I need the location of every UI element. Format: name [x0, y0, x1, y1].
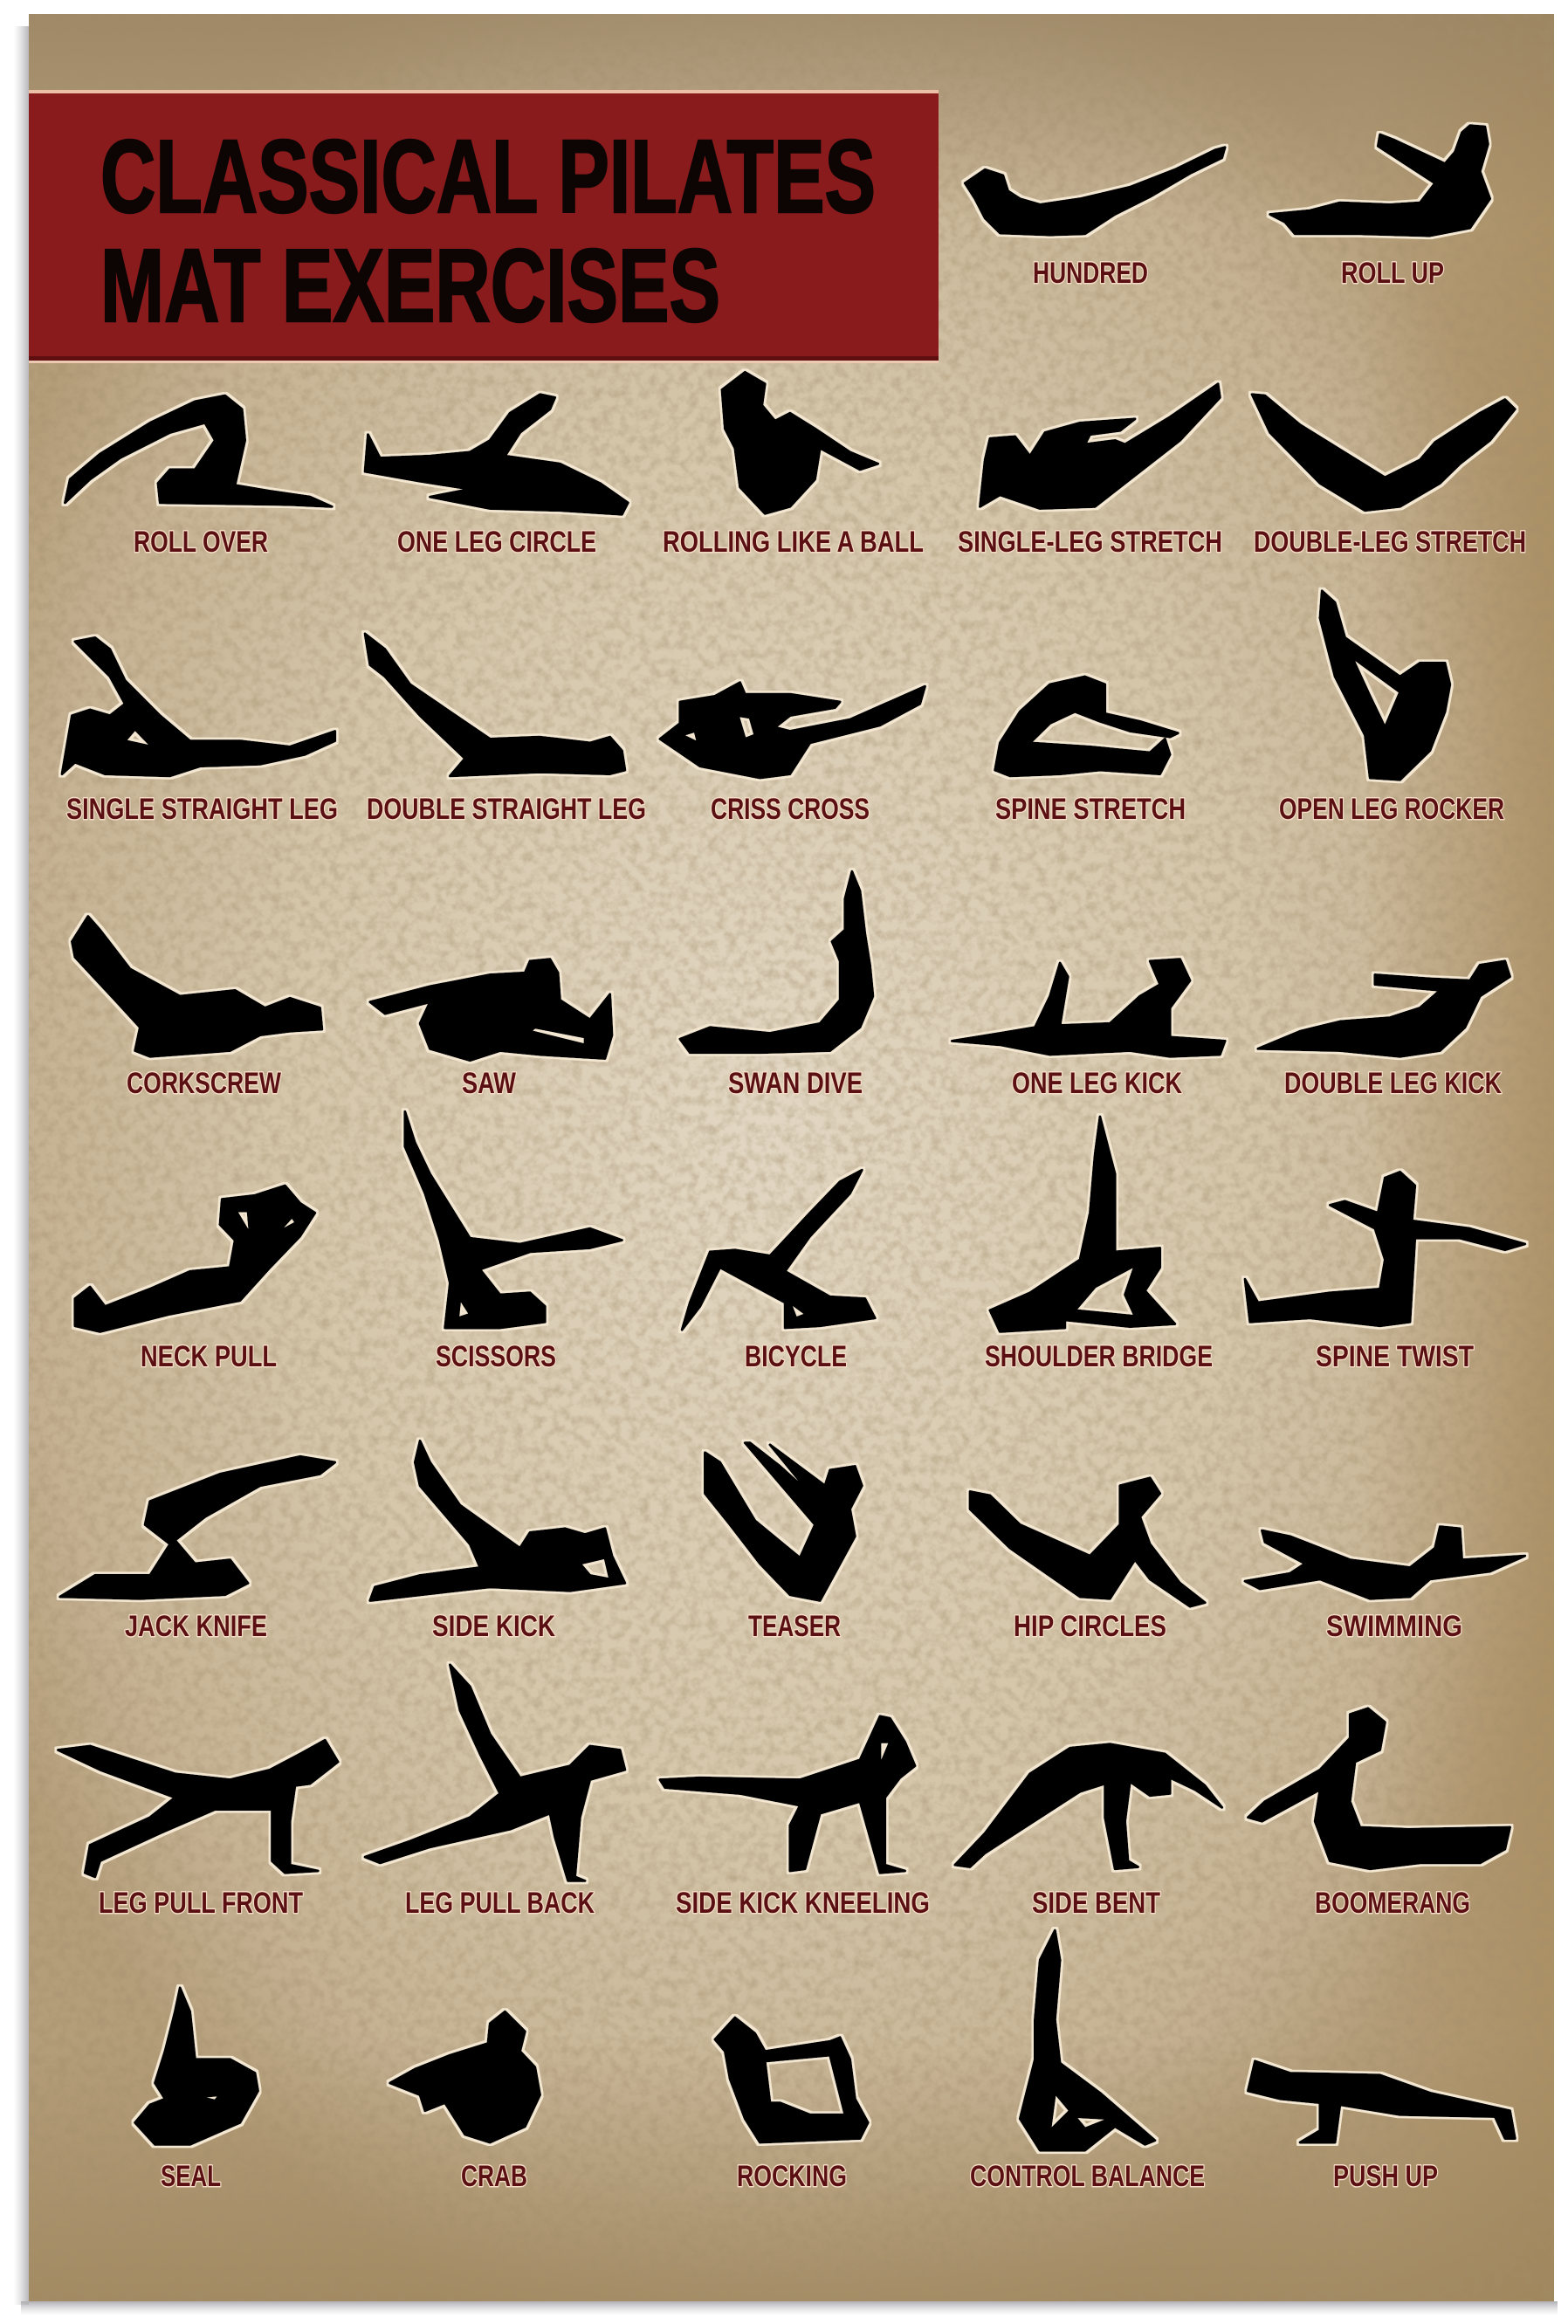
exercise: rocking [715, 2018, 868, 2193]
silhouette: bicycle [682, 1170, 875, 1330]
exercise: boomerang [1248, 1709, 1510, 1920]
label: swan dive: SWAN DIVE [728, 1067, 863, 1100]
title: CLASSICAL PILATES [100, 119, 876, 235]
silhouette: side kick kneeling [660, 1716, 915, 1873]
exercise: neck pull [75, 1186, 315, 1373]
label: hip circles: HIP CIRCLES [1014, 1610, 1166, 1643]
silhouette: saw [370, 959, 612, 1061]
label: single straight leg: SINGLE STRAIGHT LEG [66, 793, 338, 826]
label: side kick kneeling: SIDE KICK KNEELING [676, 1887, 930, 1920]
label: roll up: ROLL UP [1341, 257, 1444, 290]
label: rocking: ROCKING [737, 2160, 847, 2193]
label: teaser: TEASER [748, 1610, 841, 1643]
silhouette: double straight leg [365, 634, 625, 776]
exercise: side kick [370, 1440, 625, 1643]
label: single-leg stretch: SINGLE-LEG STRETCH [958, 526, 1222, 559]
label: leg pull front: LEG PULL FRONT [99, 1887, 303, 1920]
silhouette: one leg circle [365, 395, 628, 514]
exercise: teaser [705, 1443, 862, 1643]
label: swimming: SWIMMING [1326, 1610, 1462, 1643]
exercise: side bent [955, 1744, 1222, 1920]
silhouette: side bent [955, 1744, 1222, 1869]
exercise: corkscrew [72, 917, 322, 1100]
silhouette: leg pull front [58, 1740, 338, 1877]
silhouette: double leg kick [1258, 961, 1510, 1056]
exercise: swimming [1245, 1527, 1525, 1643]
silhouette: side kick [370, 1440, 625, 1600]
label: double leg kick: DOUBLE LEG KICK [1284, 1067, 1502, 1100]
exercise: roll up [1270, 126, 1490, 290]
exercise: double straight leg [365, 634, 646, 826]
silhouette: corkscrew [72, 917, 322, 1056]
exercise: one leg kick [952, 959, 1225, 1100]
silhouette: crab [390, 2011, 540, 2142]
label: one leg circle: ONE LEG CIRCLE [397, 526, 596, 559]
label: open leg rocker: OPEN LEG ROCKER [1279, 793, 1504, 826]
silhouette: seal [135, 1988, 258, 2144]
exercise: one leg circle [365, 395, 628, 559]
label: double straight leg: DOUBLE STRAIGHT LEG [367, 793, 646, 826]
silhouette: jack knife [60, 1456, 335, 1599]
silhouette: leg pull back [365, 1665, 625, 1881]
label: boomerang: BOOMERANG [1315, 1887, 1470, 1920]
exercise: single straight leg [62, 637, 338, 826]
silhouette: hundred [965, 148, 1225, 235]
silhouette: spine stretch [995, 677, 1178, 776]
label: side bent: SIDE BENT [1032, 1887, 1160, 1920]
exercise: hip circles [970, 1478, 1205, 1643]
silhouette: neck pull [75, 1186, 315, 1331]
silhouette: rolling like a ball [722, 372, 878, 513]
exercise: swan dive [680, 871, 873, 1100]
label: corkscrew: CORKSCREW [127, 1067, 282, 1100]
exercise: roll over [65, 395, 332, 559]
exercise: leg pull front [58, 1740, 338, 1920]
silhouette: shoulder bridge [990, 1117, 1175, 1331]
exercise: spine stretch [995, 677, 1186, 826]
silhouette: roll up [1270, 126, 1490, 236]
label: jack knife: JACK KNIFE [125, 1610, 267, 1643]
label: spine twist: SPINE TWIST [1316, 1340, 1474, 1373]
exercise: control balance [970, 1930, 1205, 2193]
exercise: double-leg stretch [1252, 395, 1526, 559]
exercise: double leg kick [1258, 961, 1510, 1100]
silhouette: push up [1248, 2061, 1515, 2142]
label: leg pull back: LEG PULL BACK [405, 1887, 595, 1920]
silhouette: rocking [715, 2018, 868, 2142]
exercise: open leg rocker [1279, 591, 1504, 826]
label: scissors: SCISSORS [436, 1340, 556, 1373]
exercise: bicycle [682, 1170, 875, 1373]
label: roll over: ROLL OVER [134, 526, 268, 559]
label: spine stretch: SPINE STRETCH [995, 793, 1186, 826]
label: push up: PUSH UP [1333, 2160, 1438, 2193]
silhouette: swan dive [680, 871, 873, 1053]
label: bicycle: BICYCLE [745, 1340, 847, 1373]
silhouette: one leg kick [952, 959, 1225, 1056]
silhouette: criss cross [660, 683, 925, 778]
label: saw: SAW [462, 1067, 517, 1100]
label: side kick: SIDE KICK [432, 1610, 555, 1643]
title banner [29, 90, 939, 363]
silhouette: control balance [1020, 1930, 1155, 2150]
title: MAT EXERCISES [100, 228, 720, 344]
label: neck pull: NECK PULL [141, 1340, 277, 1373]
exercise: jack knife [60, 1456, 335, 1643]
title [100, 119, 876, 344]
exercise: crab [390, 2011, 540, 2193]
silhouette: roll over [65, 395, 332, 506]
silhouette: boomerang [1248, 1709, 1510, 1869]
silhouette: single straight leg [62, 637, 335, 776]
exercise: push up [1248, 2061, 1515, 2193]
exercise: rolling like a ball [663, 372, 924, 559]
exercise: hundred [965, 148, 1225, 290]
silhouette: teaser [705, 1443, 862, 1600]
silhouette: open leg rocker [1320, 591, 1450, 780]
silhouette: spine twist [1245, 1172, 1525, 1326]
label: seal: SEAL [161, 2160, 221, 2193]
silhouette: single-leg stretch [980, 384, 1220, 509]
exercise: single-leg stretch [958, 384, 1222, 559]
silhouette: double-leg stretch [1252, 395, 1515, 511]
exercise: seal [135, 1988, 258, 2193]
label: criss cross: CRISS CROSS [711, 793, 870, 826]
label: hundred: HUNDRED [1033, 257, 1148, 290]
exercise: spine twist [1245, 1172, 1525, 1373]
exercise: side kick kneeling [660, 1716, 930, 1920]
label: one leg kick: ONE LEG KICK [1012, 1067, 1182, 1100]
exercise: scissors [405, 1111, 622, 1373]
silhouette: scissors [405, 1111, 622, 1328]
label: crab: CRAB [461, 2160, 527, 2193]
exercise: criss cross [660, 683, 925, 826]
exercise: shoulder bridge [985, 1117, 1213, 1373]
exercise: leg pull back [365, 1665, 625, 1920]
label: rolling like a ball: ROLLING LIKE A BALL [663, 526, 924, 559]
silhouette: hip circles [970, 1478, 1205, 1606]
label: shoulder bridge: SHOULDER BRIDGE [985, 1340, 1213, 1373]
label: control balance: CONTROL BALANCE [970, 2160, 1205, 2193]
silhouette: swimming [1245, 1527, 1525, 1599]
exercise: saw [370, 959, 612, 1100]
